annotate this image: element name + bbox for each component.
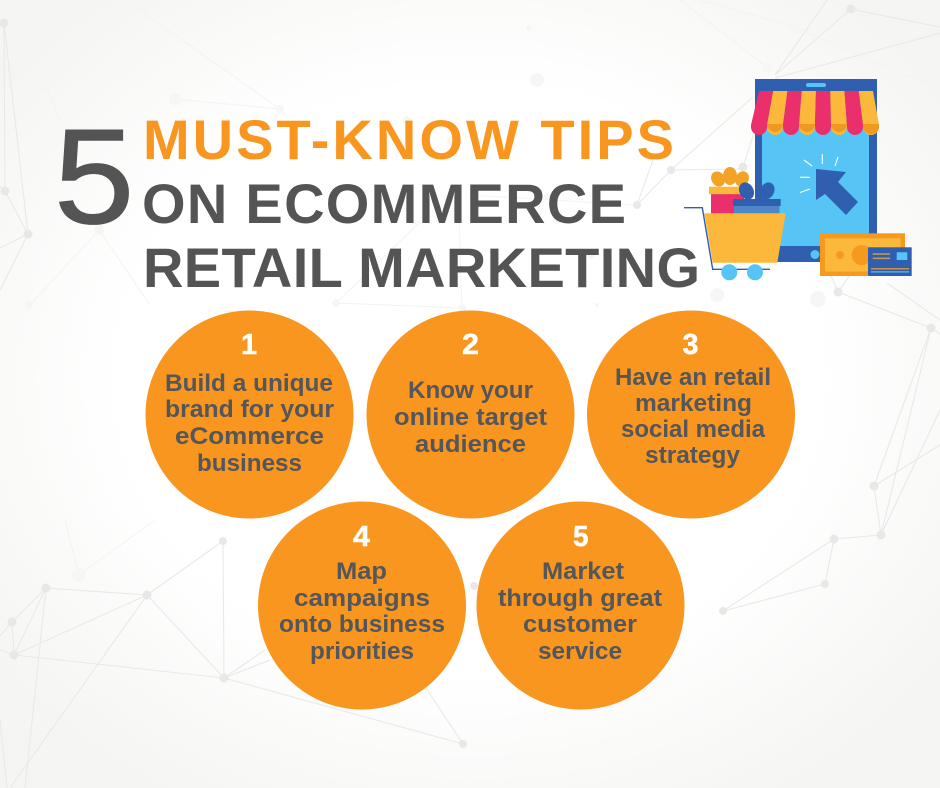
tip 3 text: Have an retail (615, 364, 771, 391)
tip 2 text: Know your (408, 377, 533, 404)
tip 1 text: business (197, 450, 302, 477)
tip 4 text: onto business (279, 611, 445, 638)
shopping cart (684, 208, 786, 280)
tip 2 text: online target (394, 404, 547, 431)
tip 1 text: brand for your (165, 396, 334, 423)
awning (751, 91, 879, 135)
illustration: online storefront (684, 79, 912, 280)
tip 3 text: marketing (635, 390, 752, 417)
tip 4 text: campaigns (294, 585, 430, 612)
tip 5 number: 5 (573, 521, 588, 553)
tip 5 text: through great (498, 585, 662, 612)
tablet (755, 79, 877, 262)
title line 3: RETAIL MARKETING (143, 236, 700, 299)
credit card (868, 247, 912, 276)
click rays (800, 154, 838, 192)
gift boxes (708, 167, 781, 214)
cursor arrow (816, 169, 858, 215)
tip 1 (146, 310, 354, 518)
tip 2 text (394, 377, 547, 458)
tip 5 text: service (538, 638, 622, 665)
tip 1 text (165, 370, 334, 477)
tip 4 (258, 502, 466, 710)
tip 2 number: 2 (462, 329, 479, 361)
tip 3 text: strategy (645, 442, 741, 469)
tip 5 text: customer (523, 611, 637, 638)
big numeral 5: 5 (54, 100, 134, 252)
tip 3 (587, 310, 795, 518)
tip 3 text: social media (621, 416, 766, 443)
tip 2 text: audience (415, 431, 526, 458)
tip 5 (476, 502, 684, 710)
tip 4 number: 4 (353, 521, 370, 553)
tip 5 text: Market (542, 558, 624, 585)
title line 2: ON ECOMMERCE (142, 172, 626, 235)
tip 1 text: Build a unique (165, 370, 333, 397)
tip 1 text: eCommerce (175, 423, 324, 450)
tip 4 text: priorities (310, 638, 414, 665)
banknote (820, 233, 905, 276)
title line 1: MUST-KNOW TIPS (143, 108, 674, 171)
tip 3 number: 3 (682, 329, 698, 361)
title (142, 108, 700, 299)
tip 5 text (498, 558, 662, 665)
tip 3 text (615, 364, 771, 469)
tip 1 number: 1 (241, 329, 257, 361)
tip 4 text (279, 558, 445, 665)
tip 4 text: Map (336, 558, 387, 585)
tip 2 (366, 310, 574, 518)
